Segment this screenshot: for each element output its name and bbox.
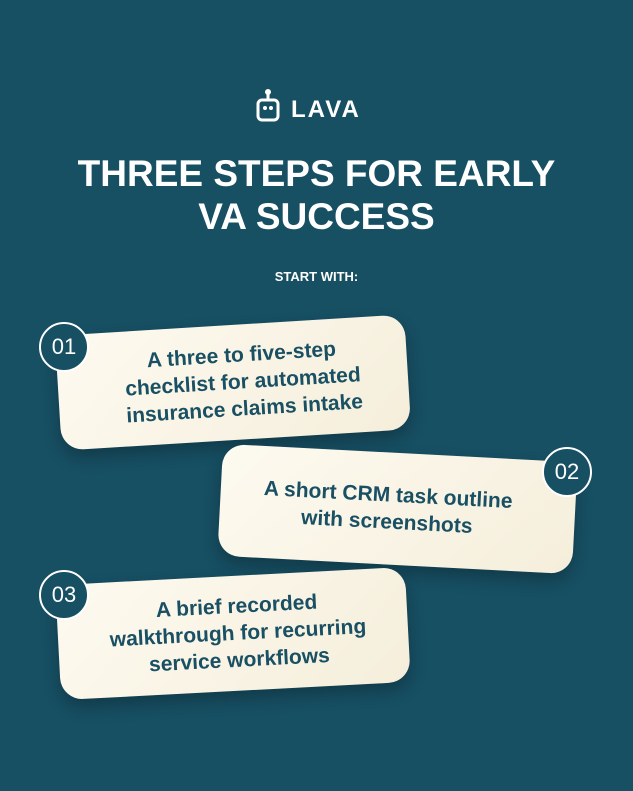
card 2: with screenshots [301,506,473,538]
badge 03 [39,570,89,620]
card 3: A brief recorded [155,591,318,622]
card 3 [55,567,411,700]
badge 02 [542,447,592,497]
badge 01: 01 [52,334,76,359]
badge 01 [39,322,89,372]
subtitle: START WITH: [275,269,358,284]
logo [256,89,361,123]
brand name: LAVA [291,96,361,123]
card 1: A three to five-step [146,338,337,372]
icon: robot [256,89,280,122]
title: VA SUCCESS [198,196,435,237]
badge 02: 02 [555,459,579,484]
card 3: walkthrough for recurring [109,615,367,651]
badge 03: 03 [52,582,76,607]
card 2 [217,444,578,574]
title [78,153,555,237]
card 1: insurance claims intake [126,390,364,428]
card 3: service workflows [148,644,330,676]
card 1 [55,314,411,451]
card 2: A short CRM task outline [263,477,513,513]
title: THREE STEPS FOR EARLY [78,153,555,194]
card 1: checklist for automated [125,363,361,401]
